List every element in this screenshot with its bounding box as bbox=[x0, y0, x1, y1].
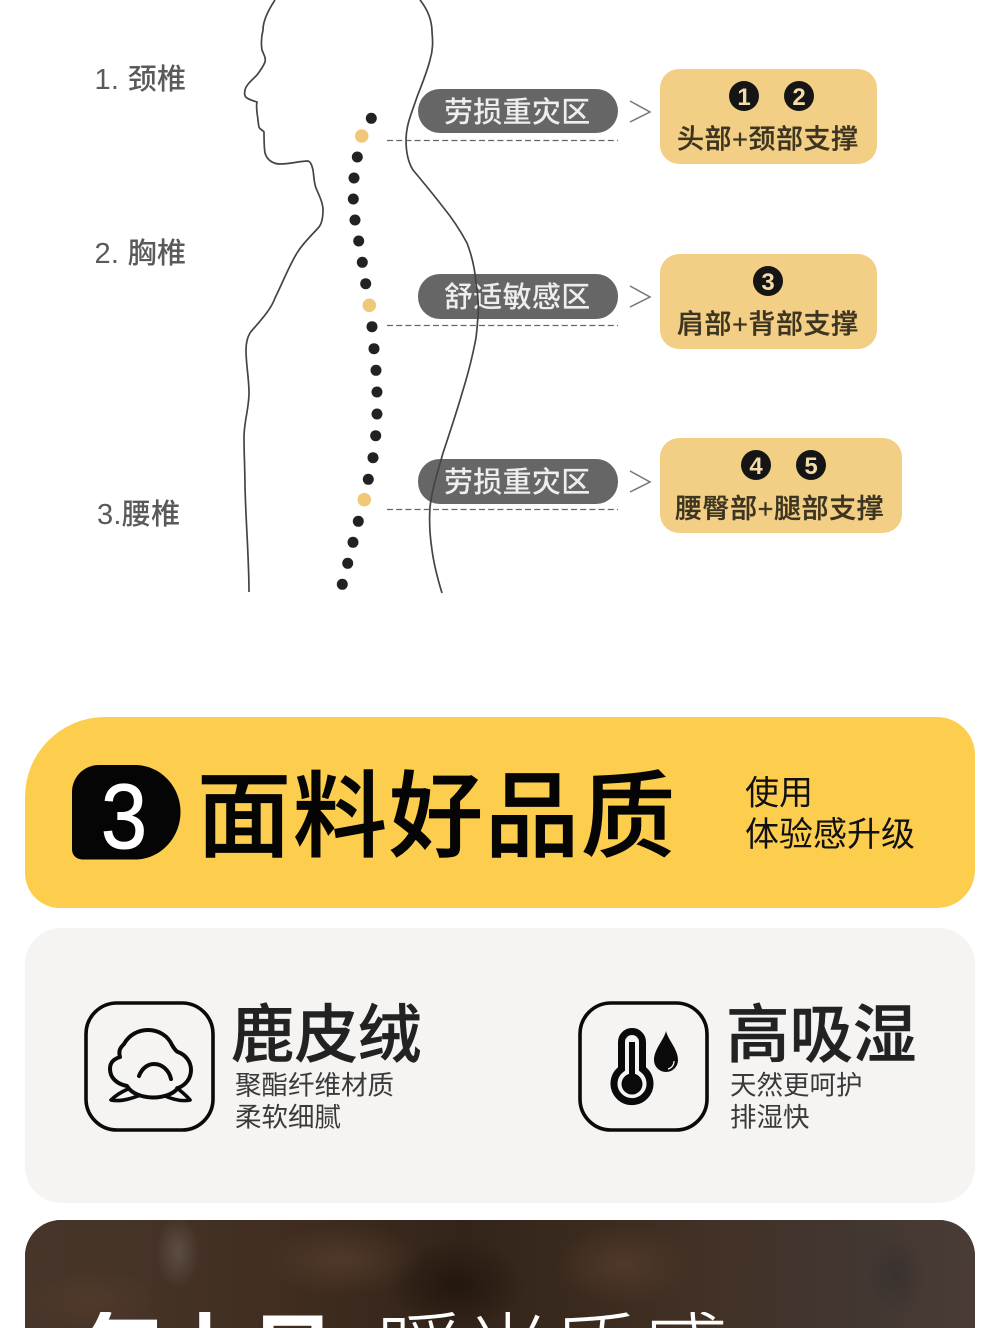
badge: number 3: 3 bbox=[101, 765, 147, 868]
support box: head and neck: 2 bbox=[792, 84, 806, 111]
arrow: chevron 1 bbox=[630, 101, 650, 122]
panel: brown texture photo bbox=[25, 1220, 975, 1328]
text: absorption description bbox=[730, 1070, 862, 1132]
label: cervical: 1. 颈椎 bbox=[94, 63, 186, 96]
heading: 面料好品质 bbox=[197, 764, 677, 869]
panel: fabric features bbox=[25, 928, 975, 1203]
heading: suede: 鹿皮绒 bbox=[231, 1001, 422, 1071]
text: suede description bbox=[235, 1070, 394, 1132]
badge: number 3 bbox=[72, 765, 180, 868]
icon: thermometer and drop bbox=[580, 1003, 707, 1130]
support box: head and neck: 1 bbox=[737, 84, 751, 111]
support box: head and neck bbox=[660, 69, 877, 164]
side note: 体验感升级 bbox=[745, 816, 915, 854]
label: thoracic: 2. 胸椎 bbox=[94, 237, 186, 270]
icon: cotton puff bbox=[86, 1003, 213, 1130]
spine dots bbox=[337, 113, 382, 590]
feature: high absorption bbox=[580, 1001, 916, 1132]
zone pill: comfort sensitive: 舒适敏感区 bbox=[444, 281, 591, 314]
heading: high absorption: 高吸湿 bbox=[726, 1001, 916, 1071]
zone pill: comfort sensitive bbox=[418, 274, 618, 319]
banner: section 3 heading bbox=[25, 717, 975, 908]
support box: shoulder and back: 3 bbox=[761, 269, 775, 296]
text: suede description: 聚酯纤维材质 bbox=[235, 1070, 394, 1100]
text: absorption description: 天然更呵护 bbox=[730, 1070, 862, 1100]
zone pill: strain zone lower bbox=[418, 459, 618, 504]
label: lumbar: 3.腰椎 bbox=[97, 498, 180, 531]
support box: waist hip and leg: 腰臀部+腿部支撑 bbox=[675, 494, 884, 524]
side note: 使用 bbox=[745, 774, 813, 812]
support box: head and neck: 头部+颈部支撑 bbox=[677, 124, 859, 154]
arrow: chevron 3 bbox=[630, 471, 650, 492]
side note bbox=[745, 774, 915, 854]
support box: shoulder and back: 肩部+背部支撑 bbox=[677, 310, 859, 340]
body outline: front silhouette bbox=[244, 0, 323, 592]
support box: waist hip and leg: 5 bbox=[804, 453, 818, 480]
body outline: back silhouette bbox=[406, 0, 478, 593]
dashed guide lines bbox=[387, 140, 618, 510]
feature: suede bbox=[86, 1001, 422, 1132]
support box: waist hip and leg: 4 bbox=[749, 453, 763, 480]
zone pill: strain zone upper: 劳损重灾区 bbox=[444, 96, 591, 129]
zone pill: strain zone lower: 劳损重灾区 bbox=[444, 466, 591, 499]
zone pill: strain zone upper bbox=[418, 89, 618, 133]
text: absorption description: 排湿快 bbox=[730, 1102, 810, 1132]
arrow: chevron 2 bbox=[630, 286, 650, 307]
spine labels bbox=[94, 63, 186, 531]
support box: waist hip and leg bbox=[660, 438, 902, 533]
support box: shoulder and back bbox=[660, 254, 877, 349]
text: suede description: 柔软细腻 bbox=[235, 1102, 341, 1132]
